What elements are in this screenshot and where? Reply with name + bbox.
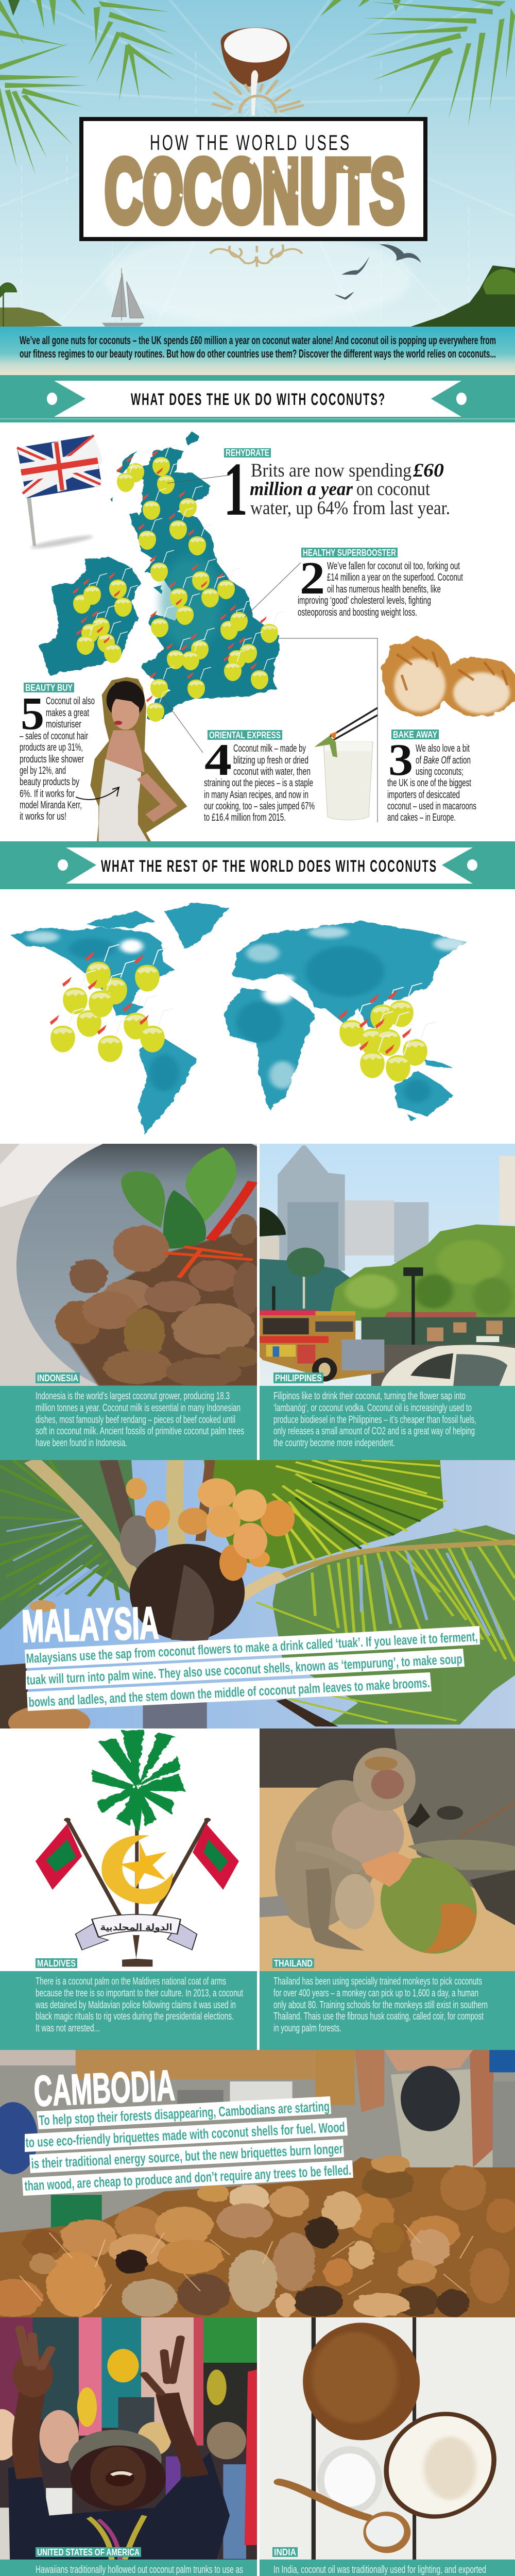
palm fronds top right <box>320 0 515 127</box>
strip text <box>25 1626 480 1711</box>
photo: monkey with coconut <box>260 1728 515 1971</box>
photo: coconut and oil on white planks <box>260 2317 515 2560</box>
callout 3: bake away: BAKE AWAY <box>393 730 437 740</box>
panel: UK section <box>0 422 515 841</box>
panel: India <box>260 2317 515 2576</box>
panel: Philippines <box>260 1144 515 1460</box>
body text <box>35 1976 243 2034</box>
coat of arms: الدولة المحلدبية <box>100 1922 173 1933</box>
strip text: than wood, are cheap to produce and don’t require any trees to be felled. <box>24 2162 352 2194</box>
body text: the country become more independent. <box>273 1437 395 1449</box>
strip text: To help stop their forests disappearing, Cambodians are starting <box>39 2098 330 2128</box>
callout 3: bake away: of Bake Off action <box>416 755 471 766</box>
flourish <box>210 244 302 267</box>
callout 4: oriental express: our cooking, too – sales jumped 67% <box>204 801 315 812</box>
text bar <box>0 1386 257 1460</box>
callout 4: oriental express <box>204 730 315 823</box>
panel: United States of America <box>0 2317 257 2576</box>
callout 1: rehydrate: water, up 64% from last year. <box>250 498 450 519</box>
callout 4: oriental express: 4 <box>204 735 232 785</box>
body text: There is a coconut palm on the Maldives national coat of arms <box>36 1976 226 1987</box>
callout 5: beauty buy: model Miranda Kerr, <box>20 800 82 811</box>
callout 2: healthy superbooster: 2 <box>300 553 325 604</box>
title line: HOW THE WORLD USES <box>150 130 351 155</box>
body text: have been found in Indonesia. <box>36 1437 127 1449</box>
strip text: to use eco-friendly briquettes made with coconut shells for fuel. Wood <box>25 2120 346 2150</box>
callout 5: beauty buy: it works for us! <box>20 811 66 822</box>
label: INDIA <box>274 2547 296 2557</box>
callout 1: rehydrate: 1 <box>224 447 248 532</box>
panel: Cambodia <box>0 2050 515 2317</box>
banner: rest of the world <box>0 841 515 889</box>
sailing boat <box>102 268 144 327</box>
sea strip with intro text <box>0 327 515 375</box>
photo: Manila street <box>260 1144 515 1386</box>
callout 4: oriental express: in many Asian recipes, and now in <box>204 789 308 801</box>
body text <box>273 1976 488 2034</box>
callout 1: rehydrate <box>224 447 450 532</box>
callout 3: bake away: the UK is one of the biggest <box>387 777 471 789</box>
callout 5: beauty buy: 6%. If it works for <box>20 788 75 800</box>
panel: Malaysia <box>0 1460 515 1740</box>
callout 3: bake away: using coconuts; <box>416 766 464 777</box>
macaroons photo <box>382 637 515 716</box>
icon: union flag <box>17 435 102 551</box>
callout 4: oriental express: straining out the pieces – is a staple <box>204 777 313 789</box>
label: THAILAND <box>274 1958 313 1969</box>
body text <box>36 1391 244 1449</box>
callout 5: beauty buy: Coconut oil also <box>46 696 95 707</box>
birds <box>334 244 421 300</box>
callout 2: healthy superbooster <box>298 548 463 618</box>
photo: Mardi Gras reveller <box>0 2317 257 2560</box>
callout 3: bake away: and cakes – in Europe. <box>387 812 456 823</box>
callout 5: beauty buy: beauty products by <box>20 776 79 788</box>
callout 1: rehydrate: £60 <box>413 460 444 481</box>
callout 4: oriental express: to £16.4 million from 2015. <box>204 812 286 823</box>
intro text <box>20 334 496 360</box>
callout 1: rehydrate: on coconut <box>356 479 431 500</box>
callout 4: oriental express: ORIENTAL EXPRESS <box>209 730 281 740</box>
callout 4: oriental express: coconut with water, then <box>233 766 311 777</box>
label: PHILIPPINES <box>275 1373 322 1383</box>
coconut markers on UK map <box>73 445 284 722</box>
strip text <box>22 2096 353 2196</box>
label: MALDIVES <box>37 1958 76 1969</box>
body text: dishes, most famously beef rendang – pieces of beef cooked until <box>36 1414 235 1426</box>
hero sky illustration <box>0 0 515 330</box>
callout 1: rehydrate: REHYDRATE <box>226 448 269 458</box>
photo: coconut palm <box>0 1460 515 1728</box>
text bar <box>260 2560 515 2576</box>
callout 5: beauty buy: – sales of coconut hair <box>20 731 88 742</box>
text bar <box>0 2560 257 2576</box>
callout 5: beauty buy: products like shower <box>20 754 84 765</box>
UK map <box>40 432 279 720</box>
label: INDONESIA <box>37 1373 78 1383</box>
title box <box>81 119 425 242</box>
callout 2: healthy superbooster: osteoporosis and boosting weight loss. <box>298 607 417 618</box>
model cutout <box>90 677 187 841</box>
heading: CAMBODIA <box>33 2061 176 2115</box>
callout 1: rehydrate: million a year <box>250 479 353 500</box>
callout 5: beauty buy: gel by 12%, and <box>20 765 66 776</box>
world map <box>10 903 467 1135</box>
panel: Indonesia <box>0 1128 338 1460</box>
panel: Maldives <box>0 1728 257 2050</box>
callout 4: oriental express: Coconut milk – made by <box>233 743 306 754</box>
callout 5: beauty buy: BEAUTY BUY <box>25 683 73 693</box>
callout 3: bake away: We also love a bit <box>416 743 470 754</box>
coconut markers on world map <box>50 944 436 1082</box>
heading: MALAYSIA <box>21 1597 159 1652</box>
callout 3: bake away <box>387 730 476 823</box>
body text: Indonesia is the world’s largest coconut grower, producing 18.3 <box>36 1391 230 1402</box>
coat of arms <box>35 1730 239 1967</box>
callout 3: bake away: 3 <box>388 735 413 785</box>
text bar <box>0 1971 257 2050</box>
palm fronds top left <box>0 0 176 175</box>
text bar <box>260 1971 515 2050</box>
body text: It was not arrested... <box>36 2023 100 2034</box>
islands <box>0 265 515 327</box>
body text: soft in coconut milk. Ancient fossils of primitive coconut palm trees <box>36 1426 244 1437</box>
body text: million tonnes a year. Coconut milk is essential in many Indonesian <box>36 1402 241 1414</box>
banner: UK <box>0 375 515 422</box>
text bar <box>260 1386 515 1460</box>
callout 5: beauty buy: 5 <box>21 688 44 739</box>
photo: coconut shell heap <box>0 2050 515 2317</box>
strip text: is their traditional energy source, but the new briquettes burn longer <box>31 2141 344 2172</box>
label: UNITED STATES OF AMERICA <box>37 2547 140 2557</box>
body text: because the tree is so important to their culture. In 2013, a coconut <box>36 1988 243 1999</box>
coconut half and milk drip <box>212 28 304 115</box>
callout 5: beauty buy <box>20 683 95 822</box>
body text: in young palm forests. <box>273 2023 341 2034</box>
panel: Thailand <box>260 1728 515 2050</box>
callout 5: beauty buy: products are up 31%, <box>20 742 83 753</box>
body text <box>273 1391 476 1449</box>
photo: beef rendang <box>0 1144 257 1386</box>
arrow to model <box>76 787 119 800</box>
body text: Hawaiians traditionally hollowed out coconut palm trunks to use as <box>36 2564 243 2575</box>
callout 2: healthy superbooster: improving ‘good’ cholesterol levels, fighting <box>298 595 431 606</box>
callout 5: beauty buy: moisturiser <box>46 719 81 730</box>
glass of coconut milk with chopsticks <box>314 708 377 820</box>
callout 5: beauty buy: makes a great <box>46 707 89 719</box>
callout 4: oriental express: blitzing up fresh or dried <box>233 755 308 766</box>
body text: black magic rituals to rig votes during the presidential elections. <box>36 2011 234 2022</box>
callout 3: bake away: importers of desiccated <box>387 789 460 801</box>
callout 2: healthy superbooster: oil has numerous health benefits, like <box>327 584 441 595</box>
callout 2: healthy superbooster: HEALTHY SUPERBOOSTER <box>303 548 396 558</box>
callout 1: rehydrate: Brits are now spending <box>251 460 411 481</box>
body text: was detained by Maldavian police following claims it was used in <box>35 1999 236 2011</box>
